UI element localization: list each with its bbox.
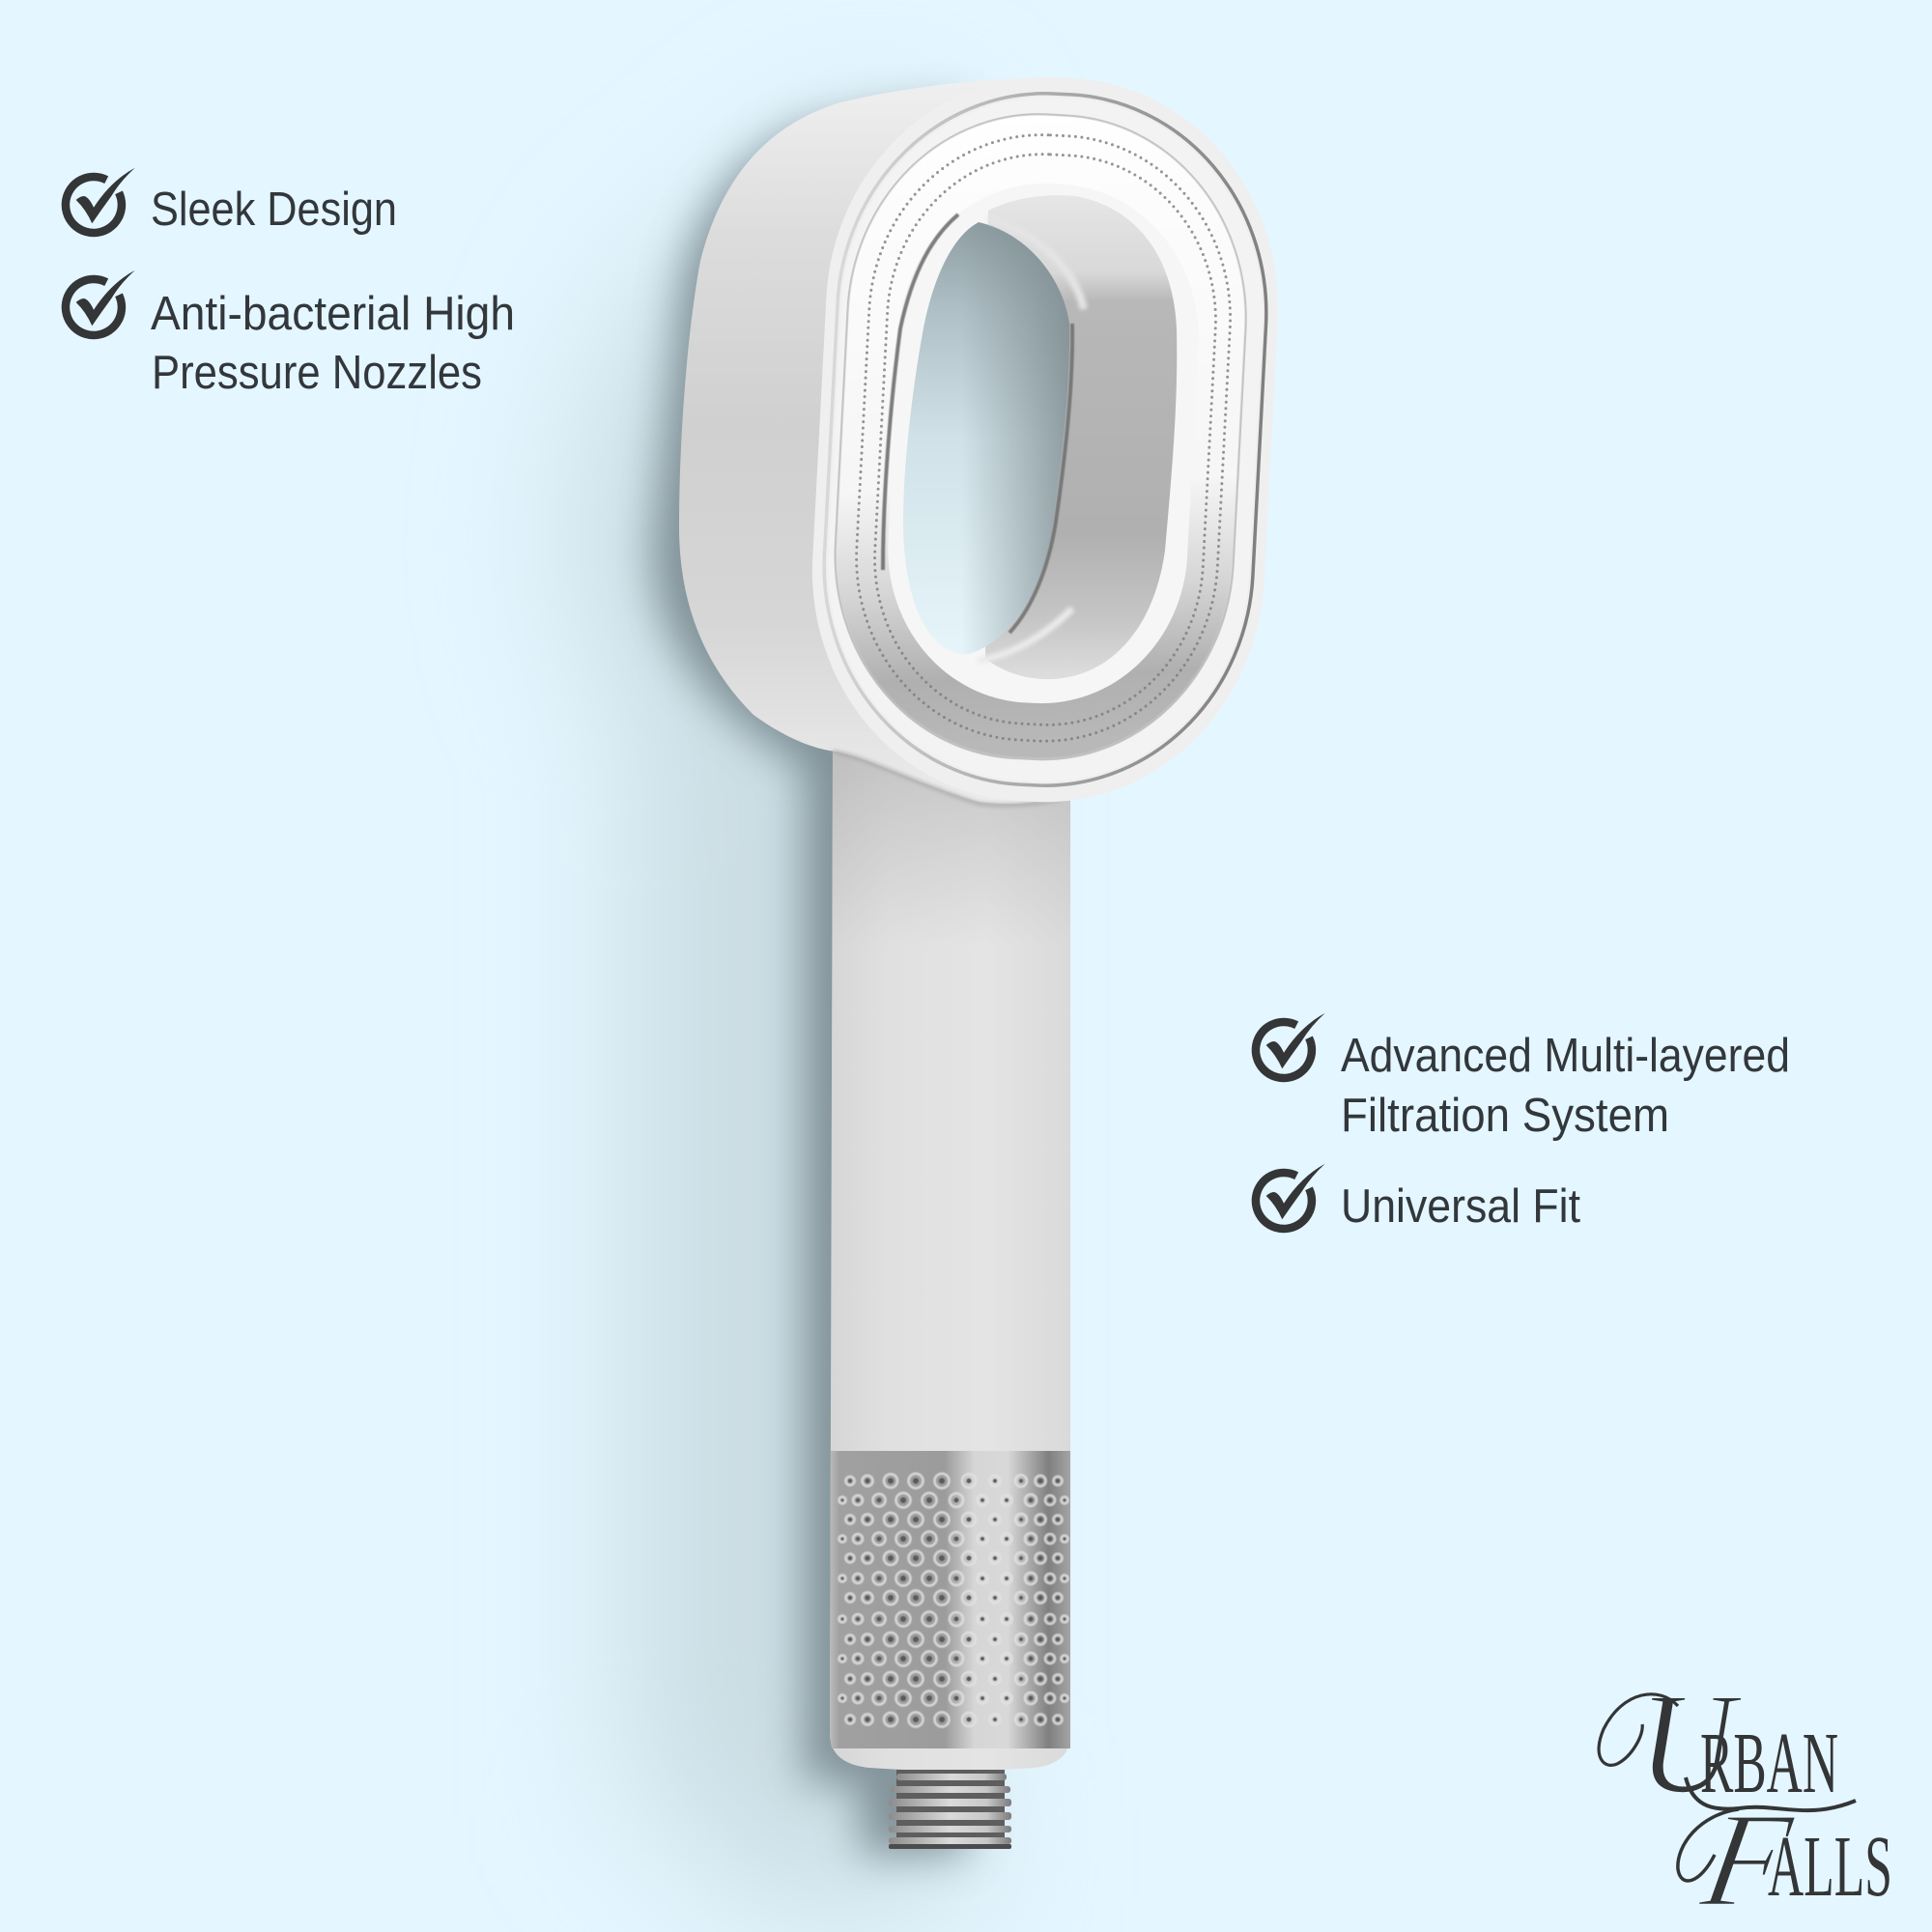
icon: check — [66, 168, 135, 233]
wall shadow: broad haze — [570, 126, 966, 1913]
wall shadow: contact — [652, 106, 966, 1855]
feature: sleek design: Sleek Design — [151, 184, 397, 236]
filter metal sleeve — [830, 1451, 1070, 1748]
feature: universal fit — [1256, 1164, 1580, 1233]
outer bezel — [801, 66, 1290, 813]
feature: nozzles: Anti-bacterial High — [151, 288, 515, 340]
head back body — [679, 77, 1159, 804]
icon: check — [1256, 1013, 1325, 1078]
rim shadow line — [883, 214, 958, 570]
second band — [817, 87, 1273, 792]
perforation dots — [838, 1474, 1068, 1727]
feature: filtration: Advanced Multi-layered — [1341, 1030, 1790, 1082]
feature: universal fit: Universal Fit — [1341, 1180, 1580, 1233]
inner rim and opening — [880, 176, 1207, 711]
icon: check — [66, 270, 135, 335]
handle — [830, 746, 1070, 1849]
opening bottom highlight — [978, 609, 1072, 661]
feature list: left — [66, 168, 515, 399]
see-through opening — [903, 222, 1069, 654]
logo: Urban Falls: U — [1638, 1663, 1743, 1824]
icon: check — [1256, 1164, 1325, 1229]
product: shower head — [679, 66, 1290, 1849]
feature: sleek design — [66, 168, 397, 236]
opening shaded side — [903, 222, 1069, 654]
front ring assembly — [801, 66, 1290, 813]
grey interior — [985, 195, 1177, 679]
feature: nozzles — [66, 270, 515, 399]
nozzle plate — [826, 105, 1255, 768]
white rim — [880, 176, 1207, 711]
logo: Urban Falls — [1599, 1663, 1892, 1932]
second groove — [825, 104, 1256, 769]
feature: nozzles: Pressure Nozzles — [152, 347, 482, 399]
feature: filtration: Filtration System — [1341, 1090, 1669, 1142]
opening top highlight — [988, 218, 1084, 309]
opening dark edge — [1009, 324, 1072, 633]
feature: filtration — [1256, 1013, 1790, 1142]
feature list: right — [1256, 1013, 1790, 1233]
threaded connector — [889, 1770, 1011, 1849]
nozzle dot rings — [847, 127, 1239, 750]
handle shoulder line — [833, 752, 1063, 806]
logo: Urban Falls: F — [1692, 1784, 1803, 1932]
groove line — [813, 83, 1277, 796]
